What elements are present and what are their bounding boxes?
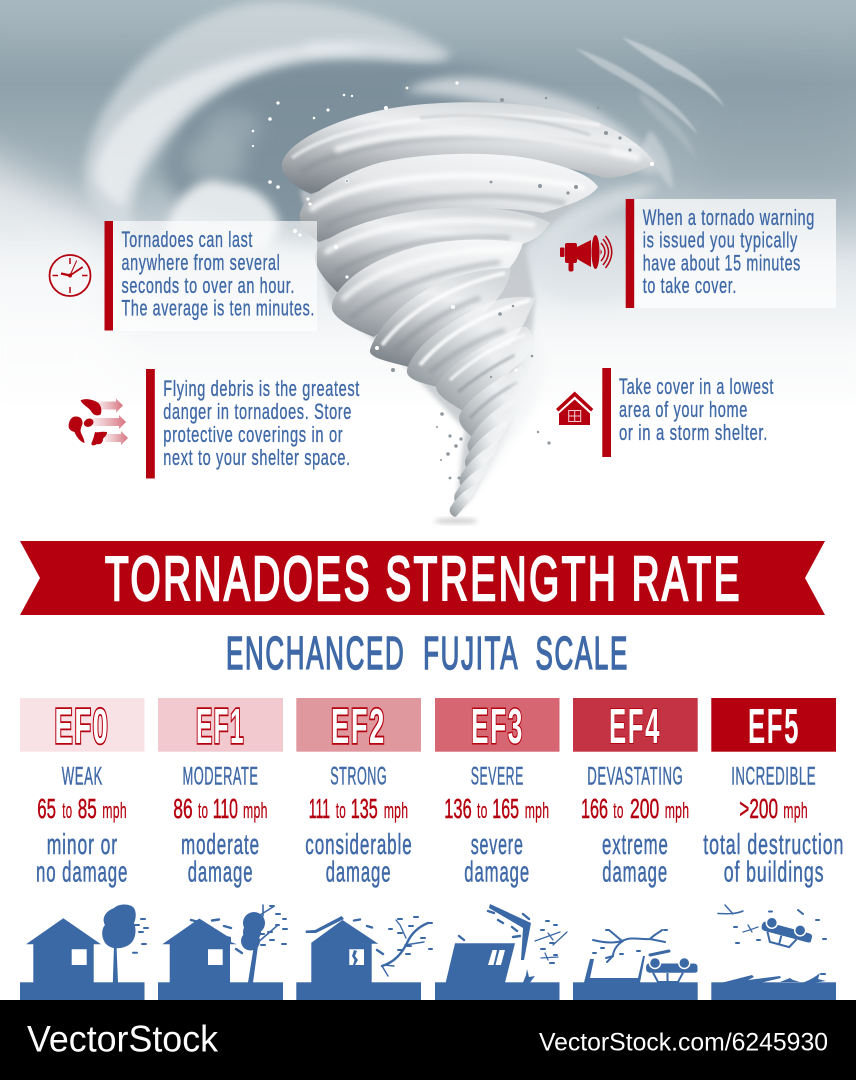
icon: megaphone xyxy=(560,235,612,272)
icon part: overturned car xyxy=(646,958,698,982)
column: EF4: damage xyxy=(602,857,668,889)
column: EF2: STRONG xyxy=(330,762,387,790)
text: duration xyxy=(122,227,315,320)
column: EF1: mph xyxy=(243,798,268,823)
text: debris: danger in tornadoes. Store xyxy=(163,399,352,424)
icon: damaged house and bent tree xyxy=(162,905,287,982)
column: EF3: SEVERE xyxy=(471,762,524,790)
text: debris: protective coverings in or xyxy=(163,422,343,447)
column: EF0: mph xyxy=(102,798,127,823)
column: EF1 xyxy=(158,698,287,1000)
column: EF1: damage xyxy=(188,857,253,889)
footer bar: VectorStock.com/6245930 xyxy=(539,1029,828,1057)
text: debris: next to your shelter space. xyxy=(163,445,351,470)
panel: flying debris xyxy=(69,369,360,478)
funnel tip xyxy=(450,484,478,517)
column: EF5 xyxy=(703,698,844,1000)
column: EF4 xyxy=(573,698,698,1000)
column: EF4: mph xyxy=(665,798,689,823)
icon: clock xyxy=(50,255,90,296)
column: EF4: to xyxy=(613,798,624,823)
icon part: overturned flying car xyxy=(758,915,814,952)
text: take cover: Take cover in a lowest xyxy=(619,374,774,399)
column: EF5: EF5 xyxy=(748,700,800,754)
column: EF3: to xyxy=(477,798,488,823)
ground shadow xyxy=(434,518,478,524)
column: EF0: to xyxy=(62,798,72,823)
panel: tornado duration xyxy=(50,221,317,331)
icon: house and tree xyxy=(26,904,148,982)
panel: tornado warning xyxy=(560,199,836,308)
column: EF3 xyxy=(435,698,567,1000)
column: EF4: DEVASTATING xyxy=(587,762,683,790)
column: EF3: EF3 xyxy=(471,700,524,754)
panel: take cover xyxy=(556,368,774,457)
funnel tier 6 xyxy=(407,297,535,388)
column: EF0: 85 xyxy=(78,793,97,824)
icon: house with broken roof and fallen tree xyxy=(306,916,432,982)
footer bar: VectorStock xyxy=(27,1019,218,1060)
column: EF5: >200 xyxy=(739,793,778,824)
column: EF1: MODERATE xyxy=(182,762,258,790)
column: EF2: mph xyxy=(384,798,408,823)
swirling clouds xyxy=(84,1,725,302)
funnel tier 10 xyxy=(465,420,508,474)
column: EF1: 110 xyxy=(213,793,238,824)
funnel tier 5 xyxy=(370,268,510,367)
text: take cover: or in a storm shelter. xyxy=(619,420,768,445)
column: EF4: extreme xyxy=(602,829,669,861)
funnel tier 8 xyxy=(459,366,526,440)
column: EF0: 65 xyxy=(37,793,56,824)
funnel tier 7 xyxy=(436,327,532,414)
text: duration: seconds to over an hour. xyxy=(122,273,295,298)
text: duration: The average is ten minutes. xyxy=(122,296,315,320)
text: take cover xyxy=(619,374,774,445)
column: EF3: 136 xyxy=(444,793,472,824)
background: stormy sky xyxy=(0,0,856,555)
footer bar xyxy=(0,1000,856,1080)
column: EF3: damage xyxy=(464,857,530,889)
column: EF0: WEAK xyxy=(62,762,103,790)
column: EF1: EF1 xyxy=(196,700,245,754)
icon: flying car and debris xyxy=(718,905,826,983)
icon: collapsed wall and flying roof xyxy=(446,904,567,982)
column: EF1: moderate xyxy=(181,829,260,861)
funnel underlay xyxy=(300,190,590,515)
column: EF2: damage xyxy=(326,857,391,889)
column: EF3: severe xyxy=(471,829,524,861)
icon: debris with arrows xyxy=(69,398,128,445)
column: EF5: mph xyxy=(783,798,808,823)
column: EF2: EF2 xyxy=(331,700,386,754)
text: warning: to take cover. xyxy=(643,273,737,298)
funnel tier 2 xyxy=(300,154,598,242)
column: EF1: 86 xyxy=(173,793,193,824)
column: EF4: EF4 xyxy=(609,700,661,754)
column: EF0 xyxy=(20,698,148,1000)
icon: house xyxy=(556,392,593,425)
funnel tier 9 xyxy=(468,398,517,460)
icon: destroyed house, branch and overturned car xyxy=(584,930,698,982)
funnel tier 3 xyxy=(315,208,550,293)
funnel tier 1 xyxy=(282,102,655,194)
flying particles xyxy=(252,81,654,479)
text: warning xyxy=(643,205,815,298)
column: EF0: no damage xyxy=(36,857,128,889)
column: EF1: to xyxy=(198,798,208,823)
column: EF2 xyxy=(296,698,432,1000)
tornado funnel xyxy=(282,102,655,524)
column: EF4: 200 xyxy=(630,793,659,824)
text: duration: anywhere from several xyxy=(122,250,280,275)
column: EF3: 165 xyxy=(492,793,519,824)
text: debris xyxy=(163,376,360,470)
soft white right fade xyxy=(470,330,543,498)
column: EF2: 111 xyxy=(309,793,330,824)
column: EF2: to xyxy=(336,798,346,823)
funnel tier 4 xyxy=(332,240,523,337)
text: take cover: area of your home xyxy=(619,397,748,422)
funnel tier 11 xyxy=(460,442,498,490)
text: duration: Tornadoes can last xyxy=(122,227,253,252)
column: EF2: 135 xyxy=(351,793,378,824)
column: EF0: EF0 xyxy=(54,700,110,754)
column: EF2: considerable xyxy=(305,829,413,861)
column: EF4: 166 xyxy=(581,793,608,824)
column: EF0: minor or xyxy=(47,829,118,861)
text: debris: Flying debris is the greatest xyxy=(163,376,360,401)
column: EF3: mph xyxy=(525,798,549,823)
funnel tier 12 xyxy=(454,464,488,507)
